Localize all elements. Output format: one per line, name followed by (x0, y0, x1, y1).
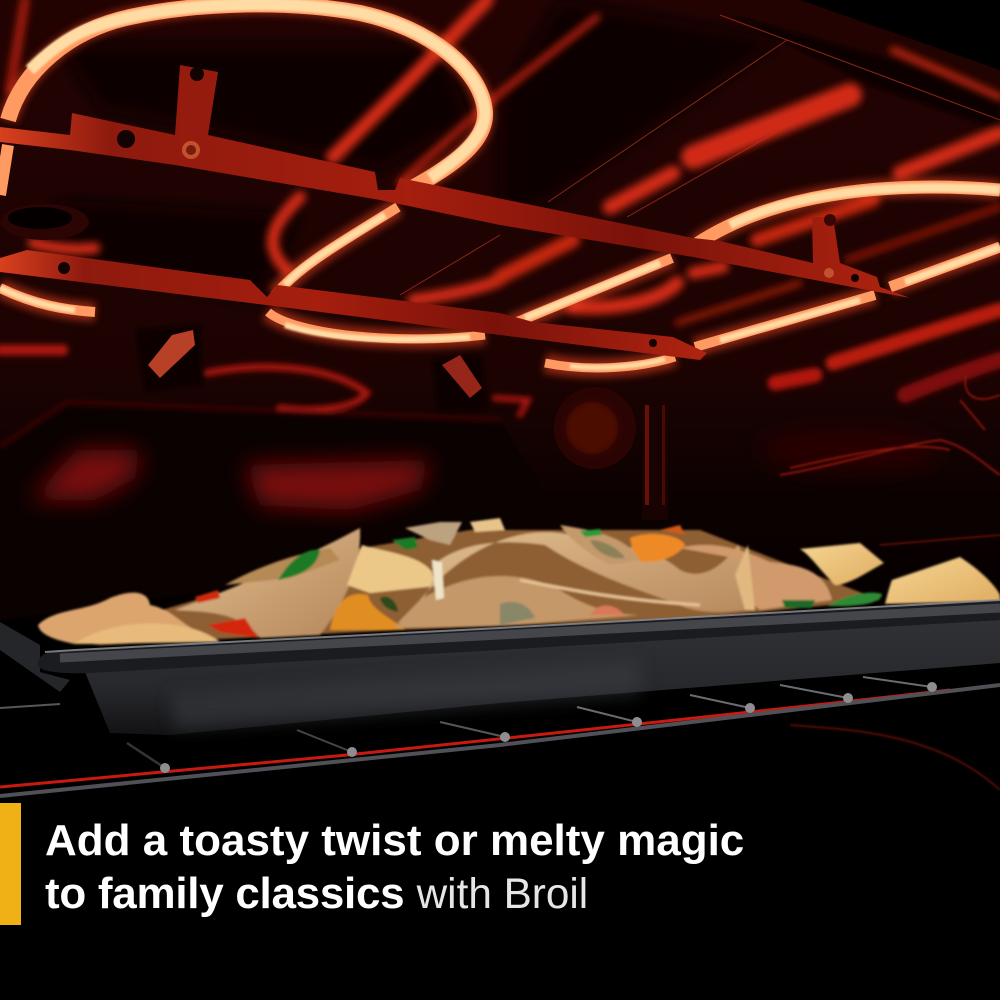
center chip (347, 545, 435, 593)
glow patches on lower wall (30, 430, 940, 510)
center melted cheese (395, 532, 748, 626)
left melted chip (175, 528, 360, 638)
broil heating coils, glow (0, 4, 1000, 368)
green pepper (278, 550, 320, 580)
caption heading: Add a toasty twist or melty magic (45, 816, 744, 865)
top chips (405, 522, 462, 545)
red reflections on oven ceiling (10, 0, 1000, 323)
highlights (520, 580, 700, 605)
caption heading (45, 816, 744, 918)
right chips (800, 543, 884, 585)
orange bits (330, 594, 405, 630)
broil heating coils, body (0, 4, 1000, 368)
left chicken pieces (38, 593, 215, 644)
baking tray (0, 600, 1000, 735)
right wall squiggles (780, 375, 1000, 475)
faint reflections lower right (790, 535, 1000, 790)
red pepper (208, 618, 258, 638)
orange carrot center (630, 534, 685, 562)
oven cavity background (0, 0, 1000, 620)
food: nachos on tray (38, 518, 1000, 645)
food base (60, 530, 880, 645)
yellow accent bar (0, 803, 21, 925)
right greens (828, 593, 882, 606)
thin ceiling panel lines (400, 15, 1000, 295)
side disc, post and wall mounts (1, 204, 668, 520)
right meat (680, 545, 832, 610)
oven rack (0, 677, 1000, 796)
red reflections on back wall (0, 310, 1000, 447)
caption heading: to family classics with Broil (45, 869, 588, 918)
green pepper seeds (380, 596, 398, 612)
coil highlights (0, 4, 1000, 368)
coil support brackets (0, 65, 910, 360)
